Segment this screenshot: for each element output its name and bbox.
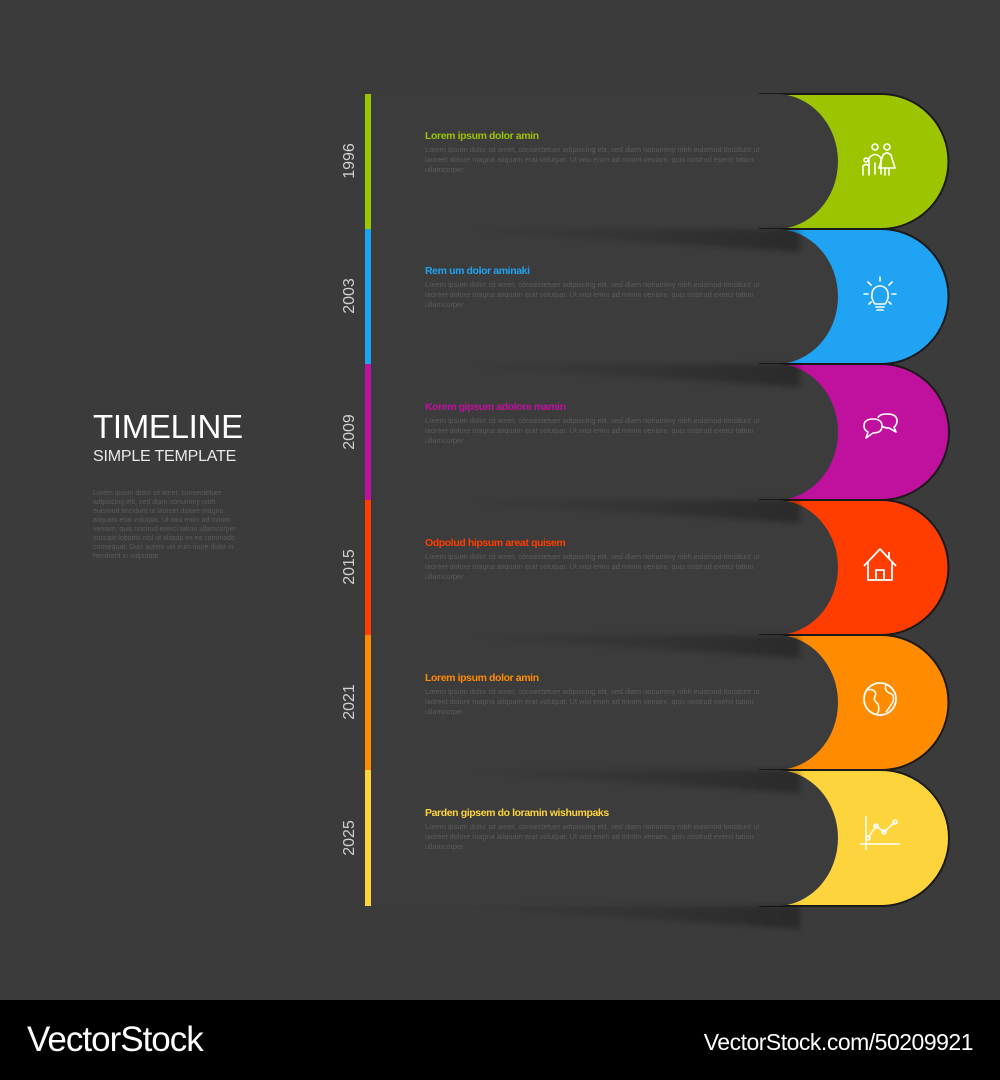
year 2015: 2015: [341, 549, 358, 585]
text block 5: Lorem ipsum dolor amin: [425, 672, 539, 684]
year 2003: 2003: [341, 278, 358, 314]
text block 1: Lorem ipsum dolor amin: [425, 130, 539, 142]
text block 5: [425, 672, 760, 716]
title: TIMELINE: [93, 408, 243, 445]
icon: globe: [864, 683, 896, 715]
text block 1: [425, 130, 760, 174]
year 2021: 2021: [341, 684, 358, 720]
text block 6: [425, 807, 760, 851]
footer: VectorStock.com/50209921: [704, 1029, 973, 1055]
text block 3: Lorem ipsum dolor sit amet, consectetuer adipiscing elit, sed diam nonummy nibh euismod tincidunt ut laoreet dolore magna aliquam erat volutpat. Ut wisi enim ad minim veniam, quis nostrud exerci tation ullamcorper: [425, 416, 759, 445]
text block 4: [425, 537, 760, 581]
year 2025: 2025: [341, 820, 358, 856]
title: SIMPLE TEMPLATE: [93, 448, 236, 465]
icon: speech bubbles: [864, 414, 897, 438]
icon: light bulb: [864, 277, 896, 310]
row 5: [365, 635, 948, 770]
icon: house: [864, 549, 896, 580]
text block 6: Parden gipsem do loramin wishumpaks: [425, 807, 609, 819]
row 1: [365, 94, 948, 229]
text block 4: Lorem ipsum dolor sit amet, consectetuer adipiscing elit, sed diam nonummy nibh euismod tincidunt ut laoreet dolore magna aliquam erat volutpat. Ut wisi enim ad minim veniam, quis nostrud exerci tation ullamcorper: [425, 552, 759, 581]
row 3: [365, 364, 949, 500]
year 2009: 2009: [341, 414, 358, 450]
row 6: [365, 770, 949, 929]
footer: VectorStock: [27, 1020, 203, 1059]
icon: family: [863, 144, 895, 175]
row 4: [365, 500, 948, 635]
footer: [0, 1000, 1000, 1080]
text block 1: Lorem ipsum dolor sit amet, consectetuer adipiscing elit, sed diam nonummy nibh euismod tincidunt ut laoreet dolore magna aliquam erat volutpat. Ut wisi enim ad minim veniam, quis nostrud exerci tation ullamcorper: [425, 145, 759, 174]
row 2: [365, 229, 948, 364]
text block 3: [425, 401, 760, 445]
intro text: Lorem ipsum dolor sit amet, consectetuer adipiscing elit, sed diam nonummy nibh euismod tincidunt ut laoreet dolore magna aliquam erat volutpat. Ut wisi enim ad minim veniam, quis nostrud exerci tation ullamcorper suscipit lobortis nisl ut aliquip ex ea commodo consequat. Duis autem vel eum iriure dolor in hendrerit in vulputate: [93, 490, 236, 560]
text block 2: Rem um dolor aminaki: [425, 265, 530, 277]
text block 4: Odpolud hipsum areat quisem: [425, 537, 565, 549]
text block 2: Lorem ipsum dolor sit amet, consectetuer adipiscing elit, sed diam nonummy nibh euismod tincidunt ut laoreet dolore magna aliquam erat volutpat. Ut wisi enim ad minim veniam, quis nostrud exerci tation ullamcorper: [425, 280, 759, 309]
title: [93, 408, 243, 465]
text block 2: [425, 265, 760, 309]
year 1996: 1996: [341, 143, 358, 179]
text block 5: Lorem ipsum dolor sit amet, consectetuer adipiscing elit, sed diam nonummy nibh euismod tincidunt ut laoreet dolore magna aliquam erat volutpat. Ut wisi enim ad minim veniam, quis nostrud exerci tation ullamcorper: [425, 687, 759, 716]
text block 6: Lorem ipsum dolor sit amet, consectetuer adipiscing elit, sed diam nonummy nibh euismod tincidunt ut laoreet dolore magna aliquam erat volutpat. Ut wisi enim ad minim veniam, quis nostrud exerci tation ullamcorper: [425, 822, 759, 851]
text block 3: Korem gipsum adolore mamin: [425, 401, 566, 413]
icon: chart: [860, 816, 900, 850]
